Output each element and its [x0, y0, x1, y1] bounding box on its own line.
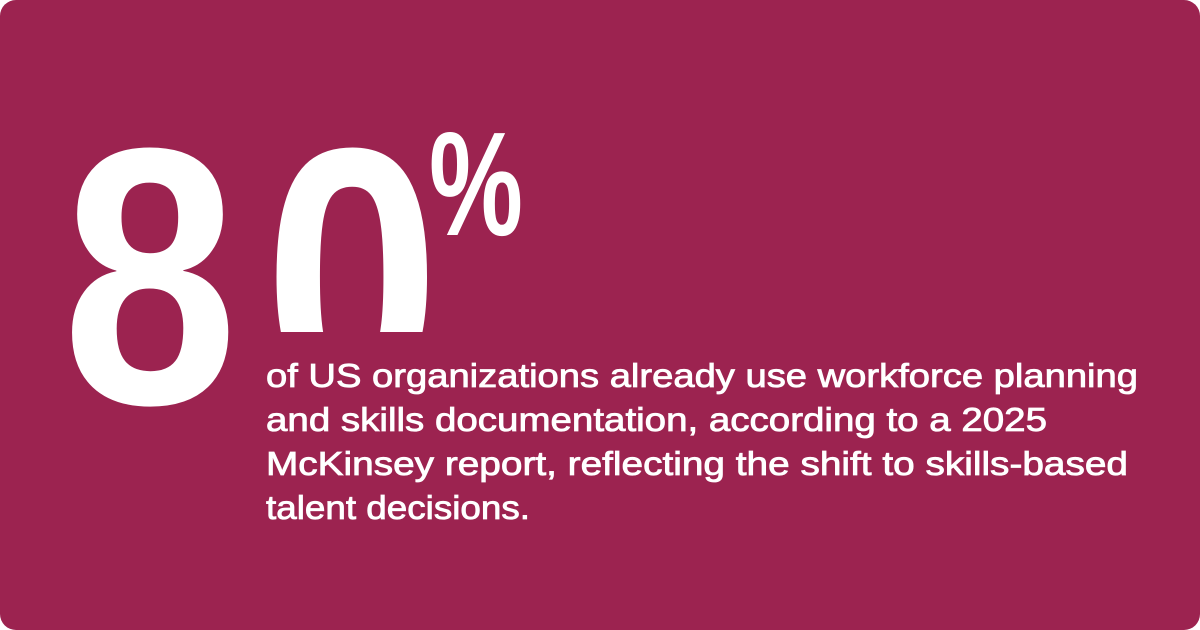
percent sign: % [429, 102, 523, 267]
description text [266, 357, 1138, 526]
big statistic 80% [72, 132, 520, 407]
description text: of US organizations already use workforce planning [266, 357, 1138, 394]
digit 0 (clipped): 0 [264, 72, 440, 481]
description text: McKinsey report, reflecting the shift to skills-based [266, 445, 1128, 482]
description text: and skills documentation, according to a 2025 [266, 401, 1047, 438]
digit 8: 8 [62, 72, 238, 481]
description text: talent decisions. [266, 489, 530, 526]
